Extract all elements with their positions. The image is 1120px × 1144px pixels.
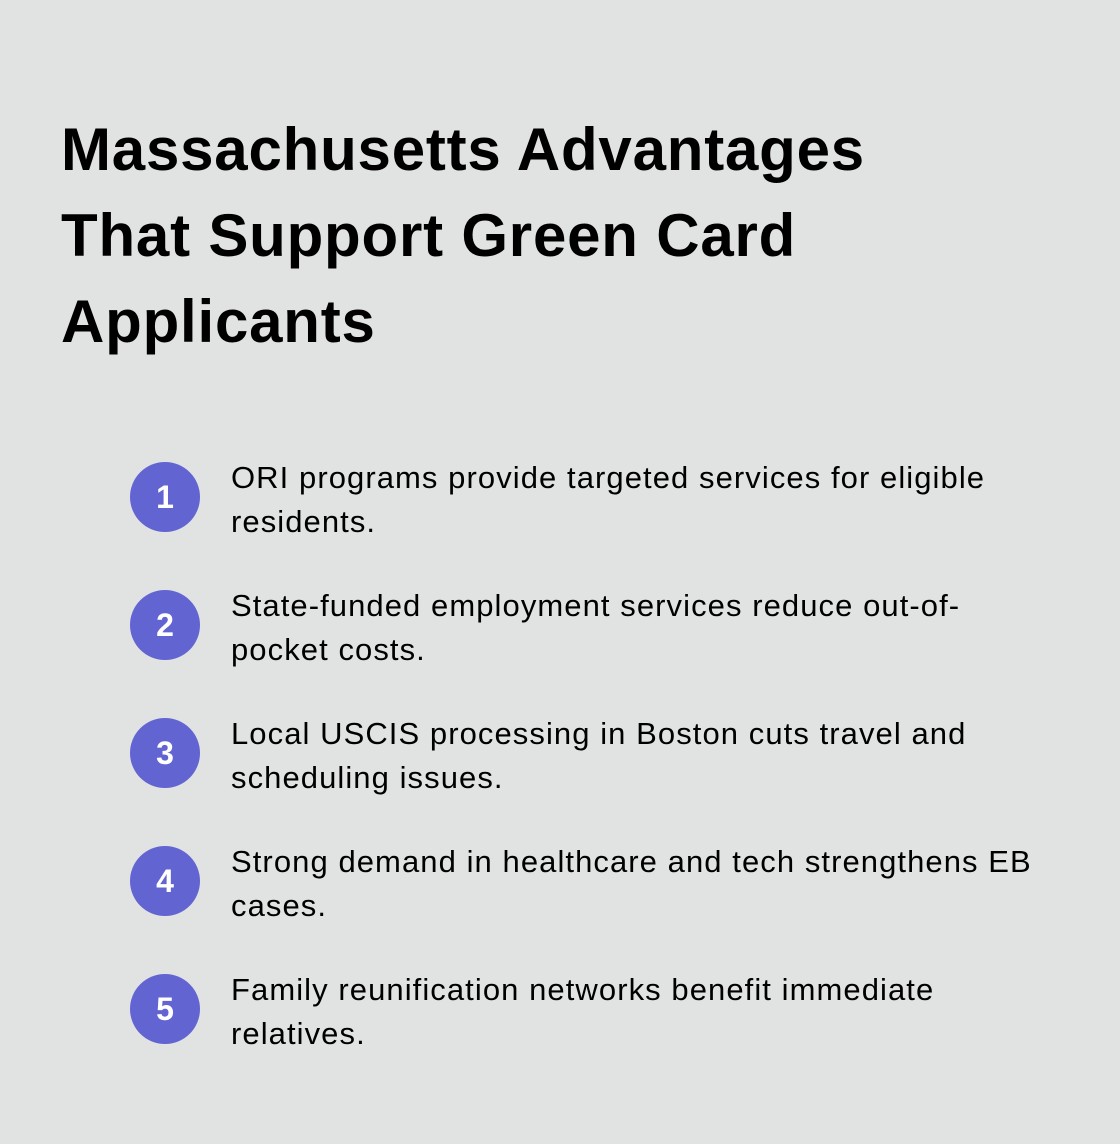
text 3 [231, 716, 966, 795]
icon: number 5: 5 [156, 991, 174, 1027]
title [61, 116, 865, 355]
text 2: State-funded employment services reduce out-of- [231, 588, 960, 623]
item 4 [130, 844, 1032, 923]
item 5 [130, 972, 934, 1051]
text 1: ORI programs provide targeted services for eligible [231, 460, 985, 495]
icon: number 5 [130, 974, 200, 1044]
title: Massachusetts Advantages [61, 116, 865, 183]
text 1 [231, 460, 985, 539]
item 1 [130, 460, 985, 539]
icon: number 3: 3 [156, 735, 174, 771]
text 4: Strong demand in healthcare and tech strengthens EB [231, 844, 1032, 879]
icon: number 1: 1 [156, 479, 174, 515]
text 4: cases. [231, 888, 327, 923]
icon: number 3 [130, 718, 200, 788]
text 5: Family reunification networks benefit immediate [231, 972, 934, 1007]
text 5: relatives. [231, 1016, 366, 1051]
text 1: residents. [231, 504, 376, 539]
icon: number 2 [130, 590, 200, 660]
icon: number 4: 4 [156, 863, 174, 899]
icon: number 1 [130, 462, 200, 532]
text 3: Local USCIS processing in Boston cuts travel and [231, 716, 966, 751]
text 2 [231, 588, 960, 667]
text 2: pocket costs. [231, 632, 426, 667]
title: Applicants [61, 288, 376, 355]
icon: number 2: 2 [156, 607, 174, 643]
icon: number 4 [130, 846, 200, 916]
text 5 [231, 972, 934, 1051]
text 3: scheduling issues. [231, 760, 504, 795]
title: That Support Green Card [61, 202, 796, 269]
item 2 [130, 588, 960, 667]
item 3 [130, 716, 966, 795]
text 4 [231, 844, 1032, 923]
